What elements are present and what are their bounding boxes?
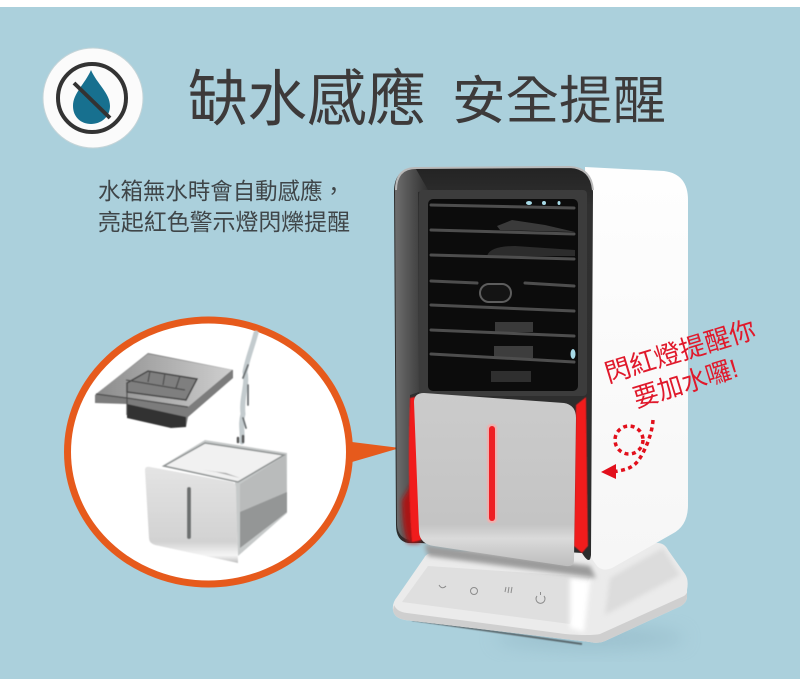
description text: 亮起紅色警示燈閃爍提醒 bbox=[98, 209, 350, 235]
callout pointer arrow bbox=[352, 442, 400, 462]
icon: no water badge bbox=[43, 48, 143, 148]
description text bbox=[98, 178, 350, 235]
red handwritten note: 要加水囉! bbox=[630, 353, 742, 413]
white side panel bbox=[585, 167, 688, 570]
red handwritten note: 閃紅燈提醒你 bbox=[601, 314, 759, 389]
shadow under tank bbox=[424, 544, 596, 578]
title: 缺水感應 bbox=[188, 65, 426, 133]
water stream bbox=[238, 333, 256, 442]
red handwritten note bbox=[601, 314, 768, 419]
ground shadow bbox=[495, 626, 685, 650]
tank lid bbox=[95, 353, 233, 428]
title: 安全提醒 bbox=[452, 73, 666, 131]
center knob bbox=[480, 284, 511, 302]
magnified water tank callout bbox=[68, 320, 400, 584]
black front housing bbox=[394, 167, 593, 560]
base bbox=[393, 543, 688, 643]
red glow at housing bottom-left bbox=[402, 480, 420, 543]
red warning glow right bbox=[574, 397, 588, 553]
housing rim highlight bbox=[396, 167, 593, 190]
title bbox=[188, 65, 666, 133]
housing left bevel bbox=[395, 169, 428, 540]
water tank bbox=[145, 440, 287, 563]
product: air cooler bbox=[393, 167, 688, 650]
red indicator slot bbox=[487, 424, 497, 523]
foot shadow line bbox=[412, 620, 582, 644]
glints bbox=[526, 201, 576, 359]
front water tank panel bbox=[414, 393, 576, 566]
fan grille bbox=[428, 199, 578, 391]
control panel icons bbox=[439, 585, 545, 603]
louvers bbox=[431, 205, 574, 362]
description text: 水箱無水時會自動感應， bbox=[98, 178, 345, 204]
orange circle bbox=[68, 320, 350, 584]
red warning glow left bbox=[409, 396, 421, 542]
inner frame bbox=[419, 190, 587, 396]
dashed red loop arrow bbox=[601, 420, 653, 479]
